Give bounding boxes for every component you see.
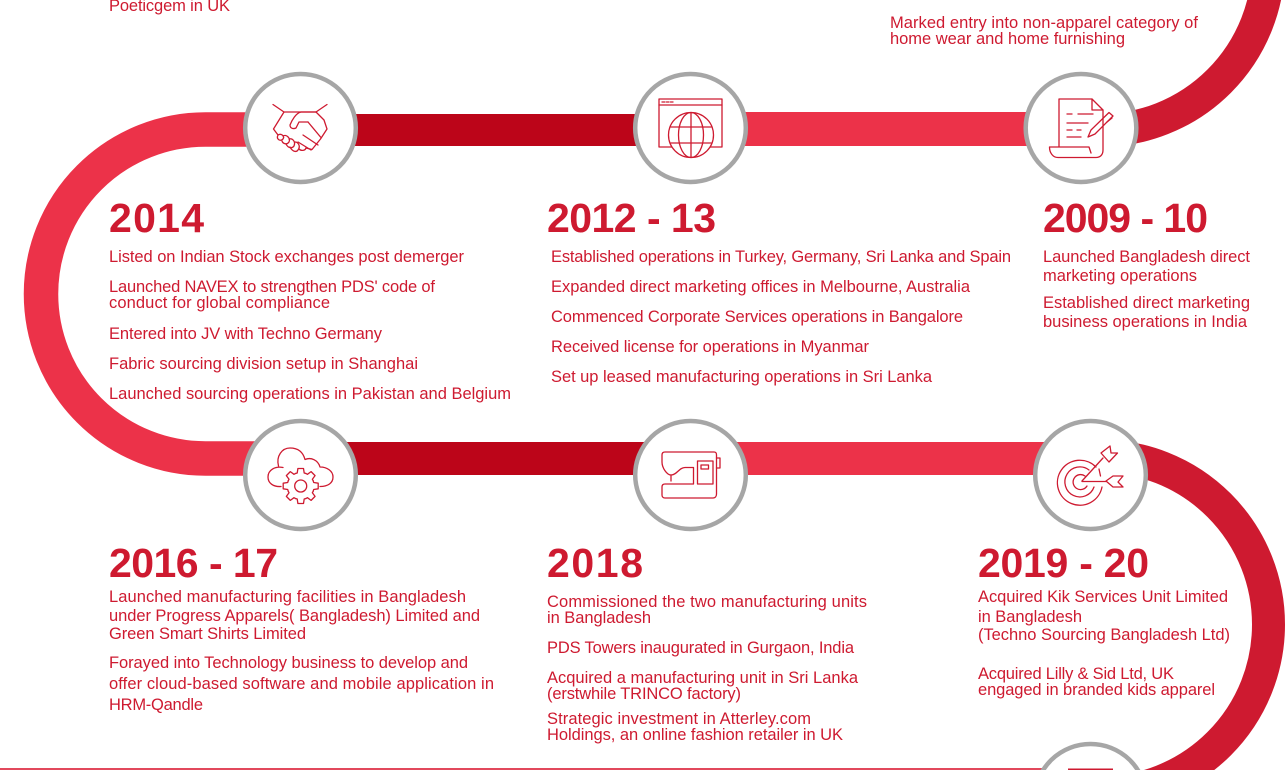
text block: 2018 events: Commissioned the two manufacturing units bbox=[547, 593, 867, 611]
text block: earlier milestone, right: Marked entry into non-apparel category of bbox=[890, 14, 1198, 32]
text block: 2016-17 events: HRM-Qandle bbox=[109, 696, 203, 714]
icon: handshake bbox=[273, 104, 327, 151]
icon: document and pen bbox=[1050, 99, 1113, 158]
text block: 2016-17 events: Forayed into Technology business to develop and bbox=[109, 654, 468, 672]
text block: 2009-10 events: Established direct marketing bbox=[1043, 294, 1250, 312]
heading: 2019-20: 2019 - 20 bbox=[978, 540, 1149, 586]
text block: 2014 events: Launched sourcing operations in Pakistan and Belgium bbox=[109, 385, 511, 403]
text block: 2018 events: PDS Towers inaugurated in Gurgaon, India bbox=[547, 639, 855, 657]
left arc bbox=[41, 130, 300, 458]
milestone node: 2012-13 globe bbox=[635, 74, 746, 182]
text block: 2012-13 events: Expanded direct marketing offices in Melbourne, Australia bbox=[551, 278, 971, 296]
text block: 2009-10 events: marketing operations bbox=[1043, 267, 1197, 285]
milestone node: next, cropped bbox=[1035, 744, 1146, 770]
text block: 2014 events bbox=[109, 248, 511, 403]
text block: 2018 events bbox=[547, 593, 867, 744]
text block: 2009-10 events: Launched Bangladesh direct bbox=[1043, 248, 1250, 266]
band segment: 2012-13 to 2009-10 bbox=[690, 112, 1081, 146]
right lower arc bbox=[1100, 456, 1268, 770]
text block: 2009-10 events bbox=[1043, 248, 1250, 331]
text block: 2014 events: Launched NAVEX to strengthen PDS' code of bbox=[109, 278, 435, 296]
icon: sewing machine bbox=[662, 452, 720, 498]
text block: 2019-20 events: Acquired Lilly & Sid Ltd, UK bbox=[978, 665, 1174, 683]
icon: target with arrows bbox=[1057, 446, 1123, 505]
milestone node: 2016-17 cloud gear bbox=[245, 421, 356, 529]
text block: 2009-10 events: business operations in India bbox=[1043, 313, 1248, 331]
bottom rule bbox=[0, 768, 1045, 770]
text block: 2016-17 events: Green Smart Shirts Limited bbox=[109, 625, 306, 643]
text block: 2016-17 events bbox=[109, 588, 494, 714]
text block: 2019-20 events: Acquired Kik Services Unit Limited bbox=[978, 588, 1228, 606]
text block: 2019-20 events: in Bangladesh bbox=[978, 608, 1082, 626]
milestone node: 2014 handshake bbox=[245, 74, 356, 182]
text block: 2016-17 events: offer cloud-based software and mobile application in bbox=[109, 675, 494, 693]
text block: 2014 events: conduct for global compliance bbox=[109, 294, 330, 312]
heading: 2009-10: 2009 - 10 bbox=[1043, 195, 1208, 241]
milestone node: 2009-10 document bbox=[1026, 74, 1136, 182]
text block: 2012-13 events: Set up leased manufacturing operations in Sri Lanka bbox=[551, 368, 933, 386]
text block: earlier milestone, right bbox=[890, 14, 1198, 48]
text block: 2018 events: in Bangladesh bbox=[547, 609, 651, 627]
icon: cropped top edge bbox=[1068, 768, 1113, 770]
text block: 2019-20 events: engaged in branded kids apparel bbox=[978, 681, 1215, 699]
band segment: 2016-17 to 2018 bbox=[300, 442, 690, 475]
text block: 2014 events: Entered into JV with Techno Germany bbox=[109, 325, 383, 343]
text block: 2014 events: Fabric sourcing division setup in Shanghai bbox=[109, 355, 418, 373]
text block: 2018 events: Strategic investment in Atterley.com bbox=[547, 710, 811, 728]
text block: 2019-20 events: (Techno Sourcing Bangladesh Ltd) bbox=[978, 626, 1230, 644]
band segment: 2014 to 2012-13 bbox=[300, 114, 690, 146]
panel: 2019-20 bbox=[978, 540, 1230, 699]
text block: 2014 events: Listed on Indian Stock exchanges post demerger bbox=[109, 248, 464, 266]
heading: 2016-17: 2016 - 17 bbox=[109, 540, 278, 586]
text block: 2018 events: (erstwhile TRINCO factory) bbox=[547, 685, 741, 703]
panel: 2016-17 bbox=[109, 540, 494, 714]
panel: 2012-13 bbox=[547, 195, 1011, 386]
text block: 2016-17 events: under Progress Apparels( Bangladesh) Limited and bbox=[109, 607, 480, 625]
text block: 2018 events: Acquired a manufacturing unit in Sri Lanka bbox=[547, 669, 859, 687]
text block: 2012-13 events: Established operations in Turkey, Germany, Sri Lanka and Spain bbox=[551, 248, 1011, 266]
panel: 2018 bbox=[547, 540, 867, 744]
text block: 2018 events: Holdings, an online fashion retailer in UK bbox=[547, 726, 843, 744]
panel: 2014 bbox=[109, 195, 511, 403]
text block: 2012-13 events: Commenced Corporate Services operations in Bangalore bbox=[551, 308, 963, 326]
heading: 2014: 2014 bbox=[109, 195, 204, 241]
icon: browser globe bbox=[659, 99, 722, 158]
text block: 2012-13 events bbox=[551, 248, 1011, 386]
heading: 2018: 2018 bbox=[547, 540, 643, 586]
icon: cloud with gear bbox=[268, 448, 333, 504]
milestone node: 2018 sewing machine bbox=[635, 421, 746, 529]
band segment: 2018 to 2019-20 bbox=[690, 442, 1090, 475]
text block: earlier milestone, right: home wear and home furnishing bbox=[890, 30, 1125, 48]
milestone node: 2019-20 target bbox=[1035, 421, 1146, 529]
text block: 2012-13 events: Received license for operations in Myanmar bbox=[551, 338, 870, 356]
top right arc bbox=[1100, 0, 1268, 130]
text block: 2016-17 events: Launched manufacturing facilities in Bangladesh bbox=[109, 588, 466, 606]
text block: 2019-20 events bbox=[978, 588, 1230, 699]
heading: 2012-13: 2012 - 13 bbox=[547, 195, 716, 241]
panel: 2009-10 bbox=[1043, 195, 1250, 331]
